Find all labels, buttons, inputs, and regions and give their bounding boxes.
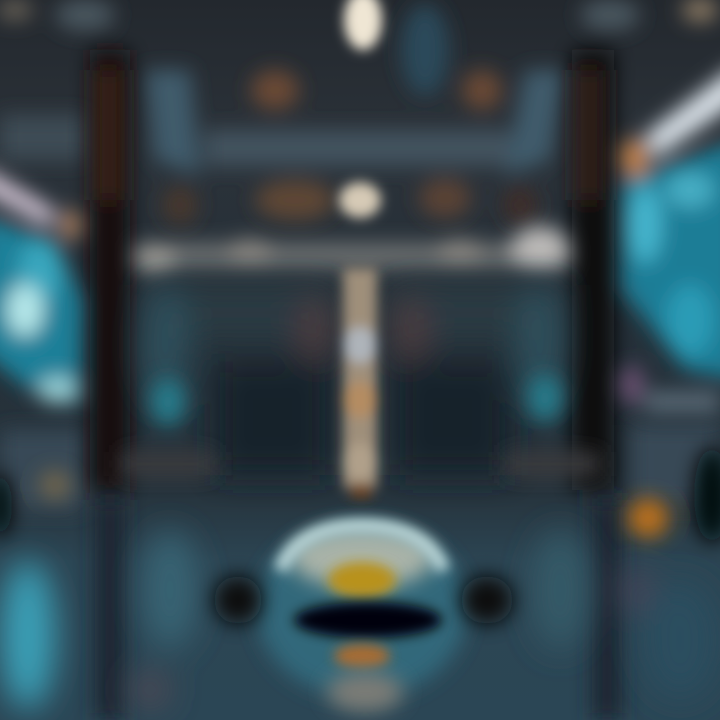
dark wings <box>214 576 262 624</box>
light dome ring <box>280 526 444 570</box>
outer halo <box>257 522 467 698</box>
middle dark panels <box>141 285 565 475</box>
light band <box>135 226 570 273</box>
dome interior <box>290 528 434 588</box>
orange reflection <box>334 644 390 668</box>
floor ellipse <box>214 522 513 712</box>
center column <box>339 0 382 498</box>
floor reflections <box>0 530 720 710</box>
right cyan panel <box>620 62 720 543</box>
lower glow <box>327 672 403 712</box>
left cyan panel <box>0 165 82 537</box>
yellow centre <box>328 562 396 598</box>
black band <box>294 602 442 638</box>
pillars <box>90 50 622 720</box>
ceiling details <box>0 0 720 510</box>
